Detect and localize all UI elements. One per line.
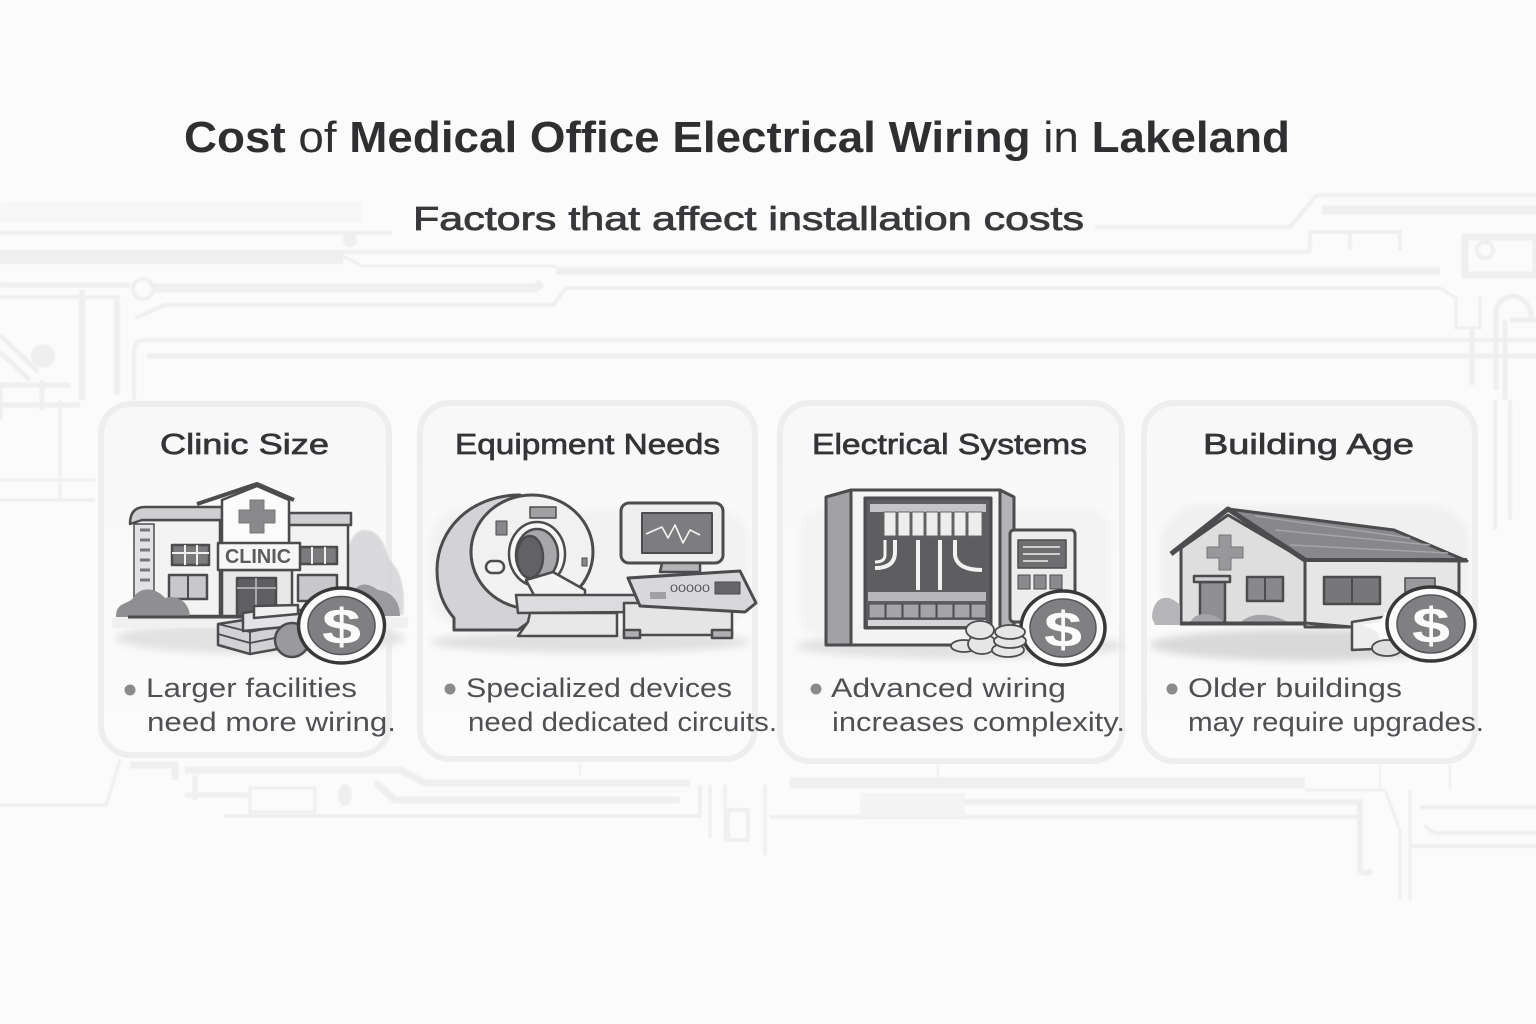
panel: clinic size (101, 404, 408, 755)
bullet text: building age: Older buildings (1188, 673, 1402, 703)
panel: building age (1144, 403, 1484, 761)
panel: equipment needs (420, 403, 777, 759)
heading: electrical systems: Electrical Systems (812, 429, 1087, 461)
dollar sign: $ (1412, 598, 1450, 654)
bullet text: clinic size: need more wiring. (147, 707, 396, 737)
heading: equipment needs: Equipment Needs (455, 429, 720, 461)
icon: MRI scanner and console (430, 495, 756, 653)
clinic sign: CLINIC (225, 546, 291, 568)
bullet text: electrical systems: increases complexity. (832, 707, 1125, 737)
bullet text: electrical systems: Advanced wiring (831, 673, 1066, 703)
bullet text: building age (1188, 673, 1484, 737)
card frame (420, 403, 755, 759)
bullet text: equipment needs (466, 673, 777, 737)
bullet text: clinic size (146, 673, 396, 737)
icon: old clinic house with coin (1150, 505, 1475, 661)
card frame (780, 403, 1122, 761)
bullet (1166, 684, 1178, 694)
bullet (124, 684, 136, 696)
bullet (810, 684, 822, 694)
bullet text: electrical systems (831, 673, 1125, 737)
icon: clinic building with coin (112, 484, 408, 663)
bullet text: equipment needs: Specialized devices (466, 673, 732, 703)
bullet text: equipment needs: need dedicated circuits. (468, 707, 777, 737)
heading: clinic size: Clinic Size (160, 429, 329, 461)
panel: electrical systems (780, 403, 1125, 761)
dollar sign: $ (1044, 602, 1082, 658)
dollar sign: $ (322, 599, 361, 655)
background circuit traces (0, 195, 1536, 900)
bullet text: building age: may require upgrades. (1188, 707, 1484, 737)
bullet (444, 684, 456, 694)
icon: electrical panel with coins (795, 490, 1125, 665)
title: Cost of Medical Office Electrical Wiring in Lakeland (184, 113, 1290, 162)
card frame (1144, 403, 1475, 761)
subtitle: Factors that affect installation costs (413, 200, 1084, 237)
console digits: 00000 (670, 583, 710, 595)
bullet text: clinic size: Larger facilities (146, 673, 357, 703)
heading: building age: Building Age (1203, 429, 1414, 461)
card frame (101, 404, 389, 755)
